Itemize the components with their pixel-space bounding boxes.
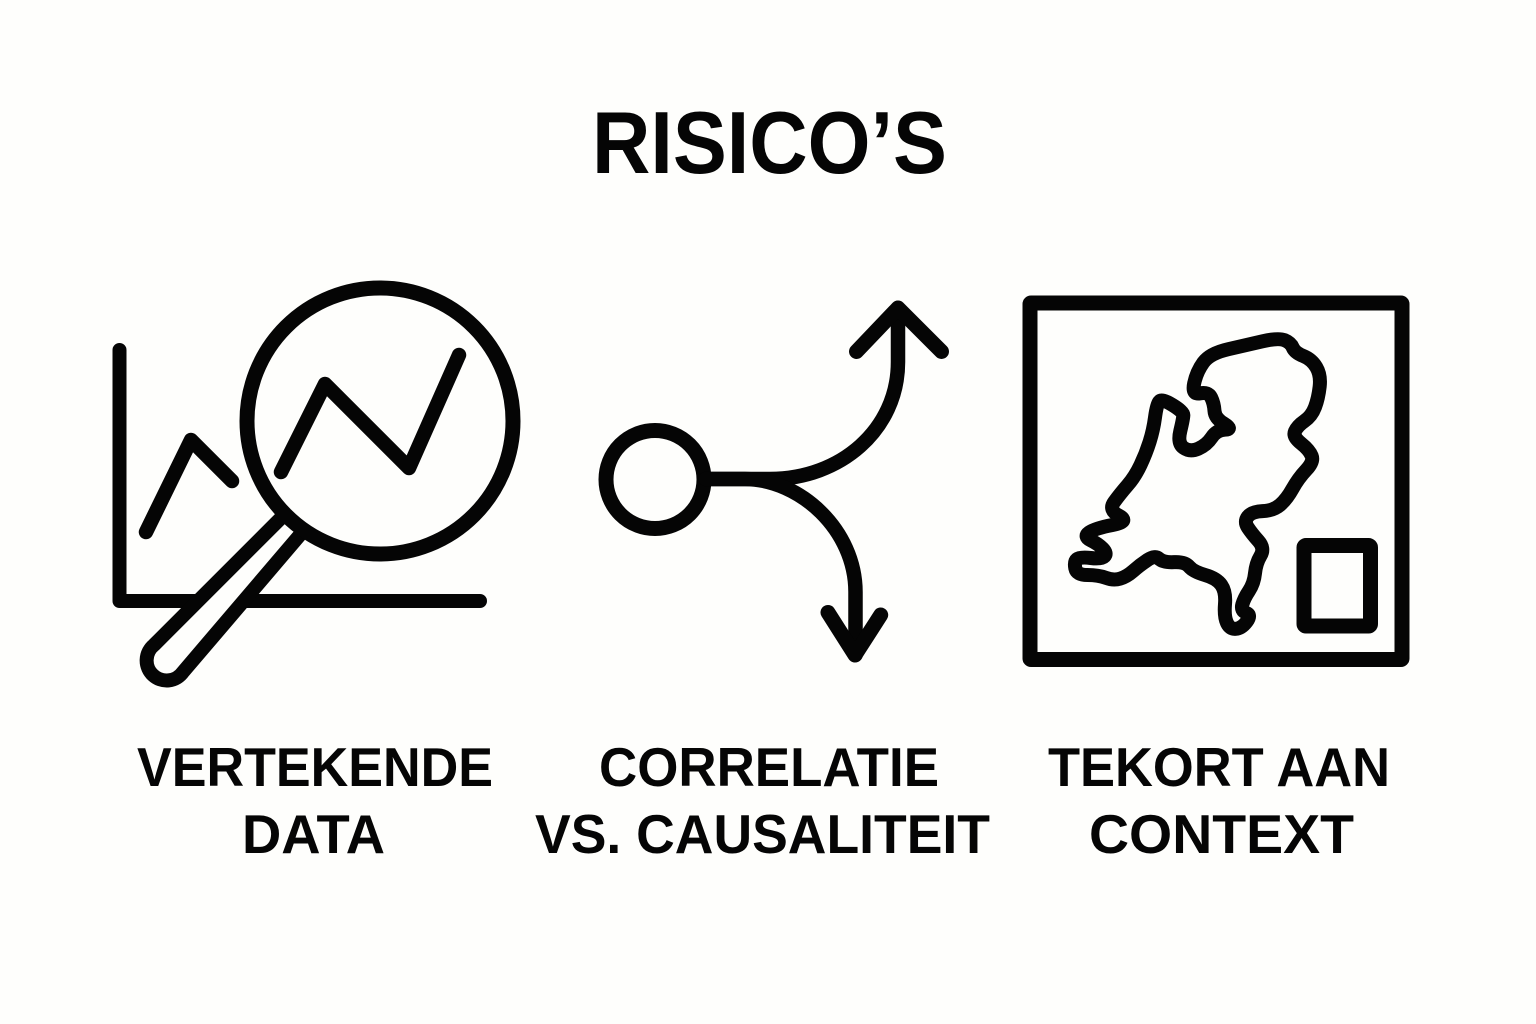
label: correlatie vs. causaliteit [535,736,990,865]
chart line inside the lens [281,355,459,472]
label: correlatie vs. causaliteit: VS. CAUSALITEIT [535,803,990,865]
icon: framed map of the Netherlands [1030,303,1402,660]
icon: magnifying glass over line chart [120,288,513,681]
label: correlatie vs. causaliteit: CORRELATIE [599,736,939,798]
downward arrowhead [828,612,881,655]
magnifier handle [147,513,305,681]
downward branch [706,479,856,655]
label: vertekende data [137,736,493,865]
chart axes [120,350,480,601]
chart line outside the lens [146,440,232,532]
icon: branching arrows from circle [606,308,942,655]
map frame [1030,303,1402,660]
small inset rectangle [1304,546,1370,626]
upward arrowhead [856,308,942,352]
title: RISICO’S [592,93,947,192]
origin circle [606,430,704,528]
upward branch [706,308,898,479]
magnifier lens [247,288,513,554]
label: vertekende data: VERTEKENDE [137,736,493,798]
label: vertekende data: DATA [242,803,385,865]
label: tekort aan context: TEKORT AAN [1048,736,1390,798]
label: tekort aan context: CONTEXT [1089,803,1354,865]
Netherlands outline [1075,339,1320,629]
label: tekort aan context [1048,736,1390,865]
